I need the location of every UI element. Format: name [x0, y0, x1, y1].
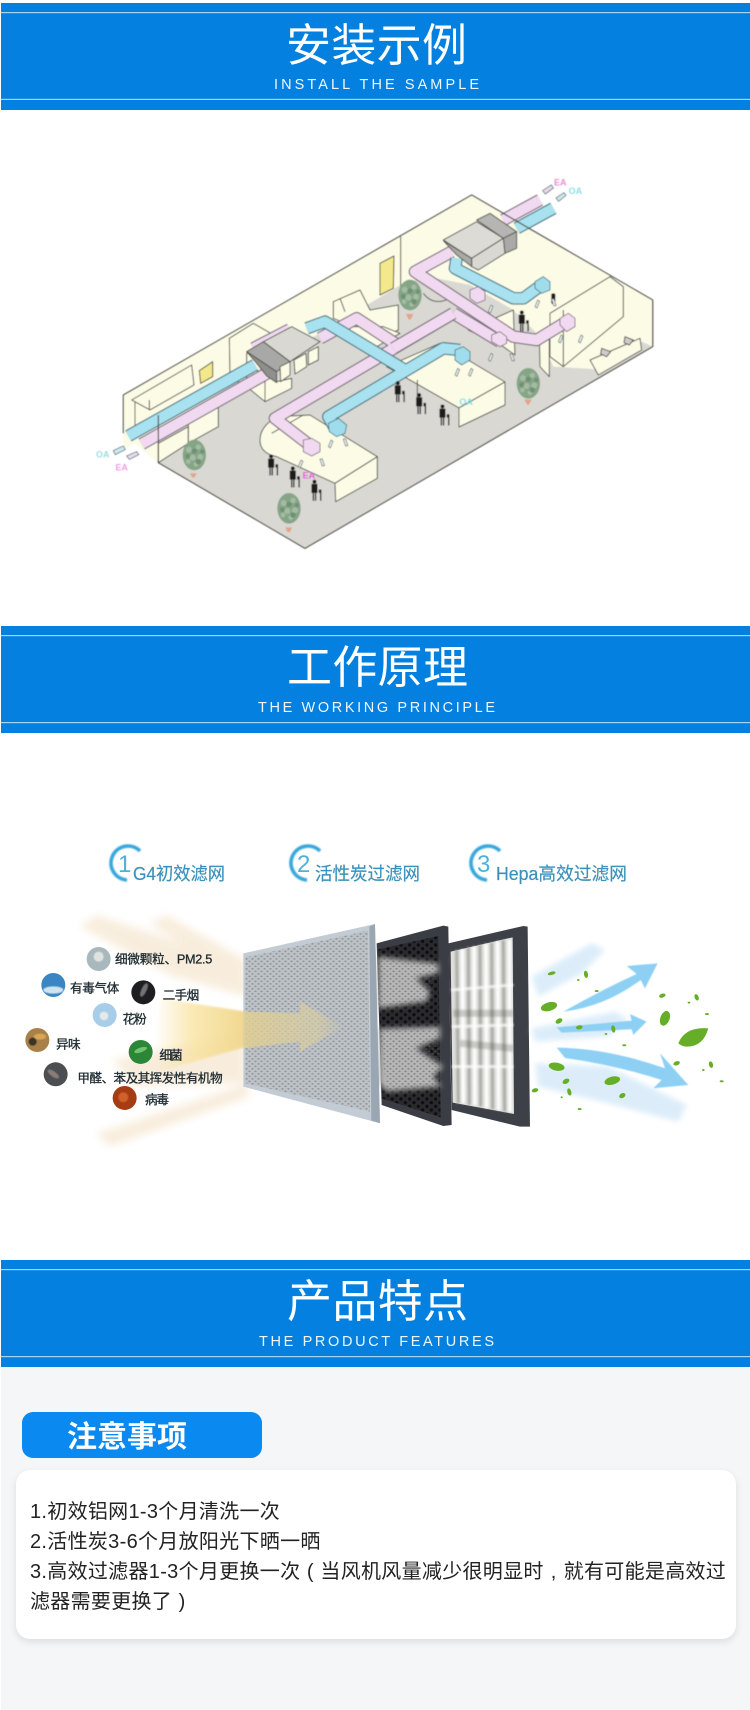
pollutant list — [25, 947, 223, 1110]
air flow labels: EA — [303, 471, 316, 481]
pollutant rays — [80, 915, 250, 1147]
pollutant: virus — [113, 1086, 169, 1110]
air streaks — [532, 943, 687, 1122]
pollutant: second-hand smoke: 二手烟 — [163, 989, 199, 1003]
pollutant: odor: 异味 — [56, 1037, 81, 1051]
yellow arrow through filter — [243, 1002, 343, 1052]
blue ducts — [128, 208, 553, 436]
building outline — [123, 195, 653, 548]
left part of office — [123, 323, 292, 463]
wall cabinets right — [550, 277, 623, 367]
pollutant: bacteria: 细菌 — [159, 1049, 183, 1063]
air handling unit right — [443, 213, 517, 270]
air flow labels: OA — [459, 397, 473, 407]
building floor — [123, 195, 653, 548]
notes card: ) — [179, 1591, 186, 1613]
filter working principle illustration — [25, 843, 724, 1148]
notes heading pill — [22, 1412, 262, 1458]
pollutant: PM2.5 — [87, 947, 212, 971]
notes card: 1.初效铝网1-3个月清洗一次 — [30, 1501, 280, 1523]
air flow labels: OA — [569, 186, 583, 196]
header band: install the sample: 安装示例 — [286, 9, 467, 74]
header band: install the sample: INSTALL THE SAMPLE — [274, 77, 479, 93]
wall cabinets — [132, 365, 194, 410]
step 3 label: Hepa filter: Hepa高效过滤网 — [496, 864, 627, 884]
air flow labels: EA — [115, 463, 128, 473]
pollutant: formaldehyde and VOCs — [44, 1062, 223, 1086]
pollutant: second-hand smoke — [131, 980, 199, 1004]
air flow labels: EA — [554, 177, 567, 187]
air flow labels — [96, 177, 583, 481]
sink unit — [590, 338, 642, 375]
pollutant: pollen — [93, 1003, 147, 1027]
back wall — [123, 195, 472, 450]
plants — [183, 280, 540, 532]
air arrows — [557, 963, 688, 1088]
pollutant: bacteria — [129, 1040, 183, 1064]
diffuser air arrows — [298, 298, 583, 468]
header band: product features — [1, 1260, 750, 1367]
header band: working principle: THE WORKING PRINCIPLE — [258, 700, 495, 716]
G4 aluminium mesh filter panel — [243, 924, 380, 1123]
notes card: , — [551, 1561, 557, 1583]
air flow labels: OA — [96, 449, 110, 459]
isometric ventilation installation diagram — [96, 177, 654, 550]
air handling unit left — [247, 327, 320, 383]
background: notes section — [1, 1367, 750, 1710]
step 3 label: Hepa filter: 3 — [477, 851, 490, 878]
step 2 label: activated carbon filter: 活性炭过滤网 — [315, 864, 420, 884]
pollutant: odor — [25, 1028, 81, 1052]
cubicle group left — [260, 415, 377, 502]
pink ducts — [128, 200, 567, 447]
office people — [268, 293, 555, 501]
step 1 label: G4 filter: 1 — [118, 851, 131, 878]
pollutant: toxic gas — [41, 973, 120, 997]
notes card: 3.高效过滤器1-3个月更换一次 当风机风量减少很明显时 就有可能是高效过 — [30, 1561, 726, 1583]
header band: product features: THE PRODUCT FEATURES — [259, 1334, 494, 1350]
notes card: 2.活性炭3-6个月放阳光下晒一晒 — [30, 1531, 321, 1553]
left room partition — [229, 323, 277, 387]
yellow door — [199, 362, 213, 383]
step 1 label: G4 filter — [111, 846, 225, 884]
header band: working principle: 工作原理 — [287, 631, 468, 696]
step 3 label: Hepa filter — [471, 846, 627, 884]
filter stack — [243, 924, 530, 1127]
notes card — [16, 1470, 736, 1639]
step labels — [111, 846, 627, 884]
header band: install the sample — [1, 3, 750, 110]
air intake arrows — [113, 185, 566, 459]
green leaves — [531, 970, 724, 1110]
notes card: ( — [307, 1561, 314, 1583]
post and partitions — [539, 330, 549, 377]
step 2 label: activated carbon filter: 2 — [297, 851, 310, 878]
duct terminal boxes — [328, 277, 550, 437]
hepa filter panel — [448, 926, 530, 1127]
cubicle group right — [387, 343, 505, 427]
notes heading pill: 注意事项 — [67, 1412, 187, 1456]
pollutant: toxic gas: 有毒气体 — [70, 980, 120, 995]
pollutant: virus: 病毒 — [145, 1093, 169, 1107]
step 2 label: activated carbon filter — [291, 846, 420, 884]
header band: product features: 产品特点 — [287, 1265, 468, 1330]
furniture around upper room — [330, 237, 653, 377]
pollutant: PM2.5: 细微颗粒、PM2.5 — [115, 953, 212, 967]
activated carbon filter panel — [377, 926, 452, 1126]
pollutant: pollen: 花粉 — [123, 1011, 147, 1026]
header band: working principle — [1, 626, 750, 733]
clean air output — [531, 943, 724, 1122]
pollutant: formaldehyde and VOCs: 甲醛、苯及其挥发性有机物 — [77, 1070, 223, 1085]
top right rooms — [401, 195, 653, 397]
notes card: 滤器需要更换了 — [30, 1591, 172, 1613]
door in top room — [380, 256, 394, 295]
step 1 label: G4 filter: G4初效滤网 — [133, 864, 225, 884]
